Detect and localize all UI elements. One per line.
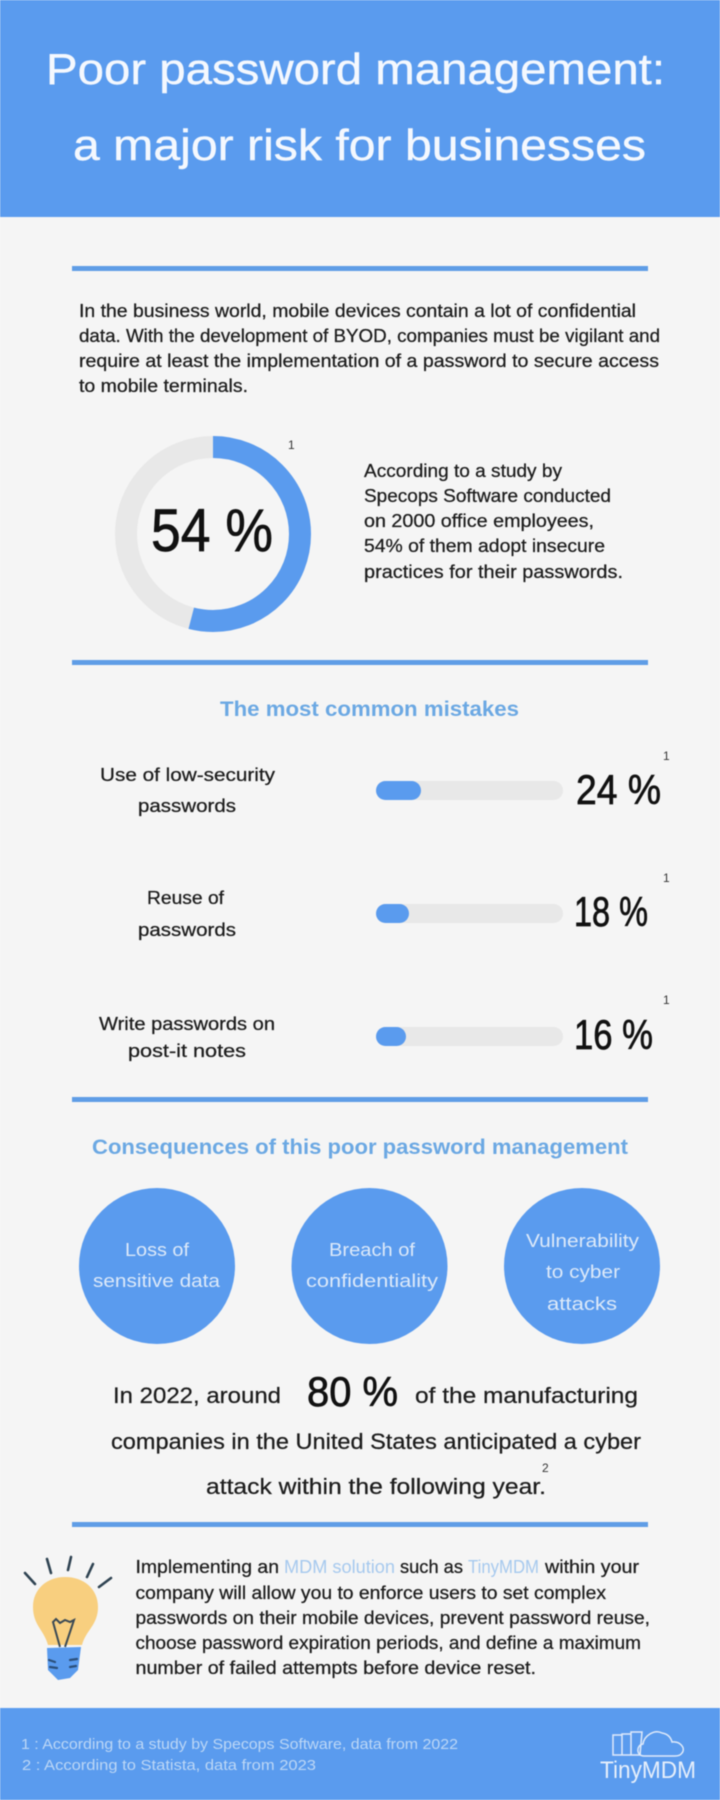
statistic: 80 % of manufacturing companies: of the manufacturing	[415, 1383, 638, 1408]
donut chart: 54 %	[126, 438, 300, 621]
circle: loss of sensitive data: Loss of	[125, 1240, 190, 1260]
mistake row: password reuse: 18 %	[574, 888, 648, 935]
MDM recommendation paragraph: company will allow you to enforce users to set complex	[136, 1583, 606, 1603]
mistake row: password reuse: Reuse of	[147, 888, 225, 908]
mistake row: post-it notes: 1	[663, 993, 670, 1007]
donut chart: 54 %: 54 %	[151, 497, 273, 564]
MDM recommendation paragraph: number of failed attempts before device reset.	[136, 1658, 536, 1678]
heading: consequences: Consequences of this poor password management	[92, 1136, 628, 1159]
circle: vulnerability to cyber attacks: attacks	[547, 1294, 617, 1314]
mistake row: low-security passwords: 1	[663, 749, 670, 763]
circle: breach of confidentiality: Breach of	[329, 1240, 416, 1260]
circle: loss of sensitive data	[79, 1188, 235, 1344]
footnotes: 2 : According to Statista, data from 2023	[22, 1757, 316, 1774]
circle: vulnerability to cyber attacks	[504, 1188, 660, 1344]
mistake row: password reuse	[138, 871, 670, 940]
circle: vulnerability to cyber attacks: to cyber	[546, 1262, 620, 1282]
donut chart: 54 %: 1	[288, 438, 295, 452]
study description: According to a study by	[364, 461, 562, 481]
heading: most common mistakes: The most common mistakes	[220, 698, 519, 721]
statistic: 80 % of manufacturing companies: attack within the following year.	[206, 1474, 546, 1499]
MDM recommendation paragraph: within your	[544, 1557, 639, 1577]
study description: Specops Software conducted	[364, 486, 611, 506]
MDM recommendation paragraph: such as	[400, 1557, 463, 1577]
mistake row: low-security passwords: 24 %	[576, 766, 661, 813]
mistake row: password reuse: passwords	[138, 920, 236, 940]
footnotes	[21, 1736, 458, 1774]
statistic: 80 % of manufacturing companies: 2	[542, 1461, 549, 1475]
statistic: 80 % of manufacturing companies: In 2022, around	[113, 1383, 281, 1408]
statistic: 80 % of manufacturing companies	[111, 1368, 641, 1499]
header band with title: a major risk for businesses	[73, 121, 646, 170]
mistake row: low-security passwords	[100, 749, 670, 816]
circle: vulnerability to cyber attacks: Vulnerability	[526, 1231, 639, 1251]
MDM recommendation paragraph: TinyMDM	[468, 1557, 539, 1577]
intro paragraph: In the business world, mobile devices contain a lot of confidential	[79, 301, 636, 321]
TinyMDM logo: TinyMDM	[600, 1757, 696, 1784]
study description: practices for their passwords.	[364, 562, 623, 582]
mistake row: low-security passwords: Use of low-security	[100, 765, 275, 785]
footnotes: 1 : According to a study by Specops Software, data from 2022	[21, 1736, 458, 1753]
MDM recommendation paragraph: MDM solution	[284, 1557, 395, 1577]
study description: on 2000 office employees,	[364, 511, 594, 531]
footer band	[0, 1708, 720, 1800]
statistic: 80 % of manufacturing companies: companies in the United States anticipated a cyber	[111, 1429, 641, 1454]
mistake row: post-it notes: post-it notes	[128, 1041, 246, 1061]
MDM recommendation paragraph: passwords on their mobile devices, prevent password reuse,	[136, 1608, 650, 1628]
circle: breach of confidentiality: confidentiality	[306, 1271, 438, 1291]
circle: breach of confidentiality	[292, 1188, 448, 1344]
statistic: 80 % of manufacturing companies: 80 %	[307, 1368, 398, 1415]
circle: loss of sensitive data: sensitive data	[93, 1271, 221, 1291]
MDM recommendation paragraph	[136, 1557, 650, 1678]
header band with title: Poor password management:	[46, 45, 665, 94]
icon: light bulb	[25, 1557, 111, 1680]
TinyMDM logo	[600, 1732, 696, 1784]
header band with title	[0, 0, 720, 217]
intro paragraph: data. With the development of BYOD, companies must be vigilant and	[79, 326, 660, 346]
intro paragraph: to mobile terminals.	[79, 376, 248, 396]
MDM recommendation paragraph: Implementing an	[136, 1557, 279, 1577]
study description: 54% of them adopt insecure	[364, 536, 605, 556]
mistake row: low-security passwords: passwords	[138, 796, 236, 816]
intro paragraph	[79, 301, 660, 396]
intro paragraph: require at least the implementation of a password to secure access	[79, 351, 659, 371]
MDM recommendation paragraph: choose password expiration periods, and define a maximum	[136, 1633, 641, 1653]
mistake row: post-it notes: 16 %	[574, 1011, 653, 1058]
mistake row: post-it notes	[99, 993, 670, 1061]
mistake row: post-it notes: Write passwords on	[99, 1014, 275, 1034]
mistake row: password reuse: 1	[663, 871, 670, 885]
study description	[364, 461, 623, 582]
